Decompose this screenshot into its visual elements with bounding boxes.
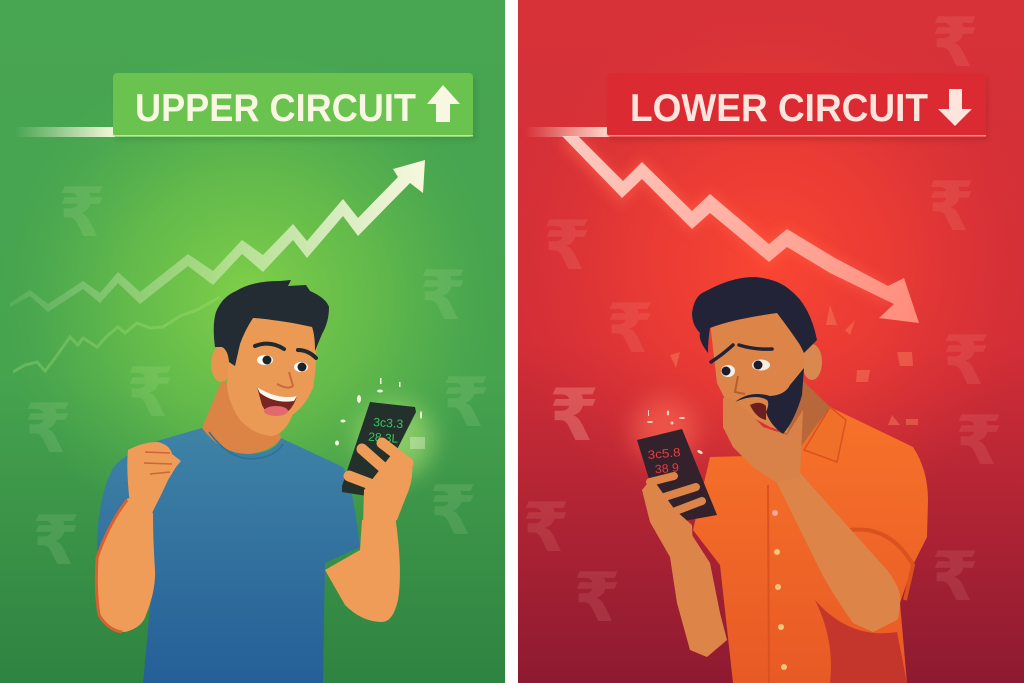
ear xyxy=(802,344,822,380)
prominent rupee symbol: ₹ xyxy=(549,376,599,456)
ear xyxy=(211,346,231,382)
rising arrow chart xyxy=(10,160,425,312)
sparkles xyxy=(647,410,703,455)
faint rupee symbols: ₹ xyxy=(522,490,570,566)
nose xyxy=(277,372,293,388)
raised arm xyxy=(95,498,155,632)
faint rupee symbols: ₹ xyxy=(931,5,979,81)
hair xyxy=(214,280,329,366)
panel: upper circuit xyxy=(0,0,505,683)
hand on phone xyxy=(642,476,702,557)
man celebrating xyxy=(95,280,433,683)
faint rupee symbols: ₹ xyxy=(573,560,621,636)
eyebrows xyxy=(711,345,772,362)
beard xyxy=(735,368,804,434)
phone: 3c3.3 xyxy=(373,415,404,431)
phone glow xyxy=(357,402,433,478)
faint rupee symbols: ₹ xyxy=(126,355,174,431)
icon: down arrow xyxy=(938,89,972,126)
faint secondary chart line xyxy=(13,297,220,372)
phone: 38 9 xyxy=(654,460,680,476)
faint rupee symbols: ₹ xyxy=(931,539,979,615)
neck xyxy=(770,378,830,452)
faint rupee symbols: ₹ xyxy=(442,365,490,441)
hand on phone xyxy=(349,443,412,527)
faint rupee symbols: ₹ xyxy=(24,391,72,467)
falling debris xyxy=(670,305,918,425)
phone: 3c5.8 xyxy=(647,445,681,462)
left arm xyxy=(670,535,727,657)
faint rupee symbols: ₹ xyxy=(942,323,990,399)
eyebrows xyxy=(255,344,316,358)
shirt shadow xyxy=(815,600,907,683)
faint rupee symbols: ₹ xyxy=(543,208,591,284)
faint rupee symbols: ₹ xyxy=(927,169,975,245)
neck xyxy=(202,380,281,454)
forearm holding phone xyxy=(325,515,400,622)
nose xyxy=(735,376,745,394)
falling arrow chart xyxy=(562,136,919,323)
raised fist xyxy=(127,442,181,513)
hair xyxy=(692,277,817,353)
eyes xyxy=(721,365,735,377)
open mouth xyxy=(750,403,766,420)
heading: upper circuit: UPPER CIRCUIT xyxy=(135,87,416,130)
face xyxy=(708,295,805,433)
open smile xyxy=(257,387,297,416)
panel background: green xyxy=(0,0,505,683)
faint rupee symbols: ₹ xyxy=(32,503,80,579)
orange shirt xyxy=(693,407,928,683)
banner base line xyxy=(525,127,610,137)
banner base line xyxy=(15,127,115,137)
rolled sleeve xyxy=(850,529,913,600)
blue t-shirt xyxy=(97,428,360,683)
shirt buttons xyxy=(772,510,787,670)
shirt collar xyxy=(804,407,846,462)
icon: up arrow xyxy=(427,85,460,122)
upper circuit banner xyxy=(113,73,477,141)
phone: 28 3L xyxy=(368,430,399,446)
faint rupee symbols: ₹ xyxy=(955,403,1003,479)
faint rupee symbols xyxy=(522,5,1003,636)
eyes xyxy=(257,355,273,365)
faint rupee symbols: ₹ xyxy=(606,291,654,367)
hand over mouth xyxy=(723,398,803,483)
faint rupee symbols xyxy=(24,175,490,579)
man worried xyxy=(633,277,928,683)
panel background: red xyxy=(518,0,1024,683)
panel: lower circuit xyxy=(518,0,1024,683)
faint rupee symbols: ₹ xyxy=(419,258,467,334)
faint rupee symbols: ₹ xyxy=(429,473,477,549)
lower circuit banner xyxy=(607,73,988,141)
phone xyxy=(342,402,416,497)
phone glow xyxy=(633,398,697,462)
sparkles xyxy=(335,378,425,449)
forearm to chin xyxy=(777,473,900,632)
heading: lower circuit: LOWER CIRCUIT xyxy=(630,87,928,130)
phone xyxy=(637,429,717,522)
face xyxy=(227,305,317,436)
faint rupee symbols: ₹ xyxy=(58,175,106,251)
falling arrow glow xyxy=(567,137,892,297)
shirt placket xyxy=(768,485,769,683)
